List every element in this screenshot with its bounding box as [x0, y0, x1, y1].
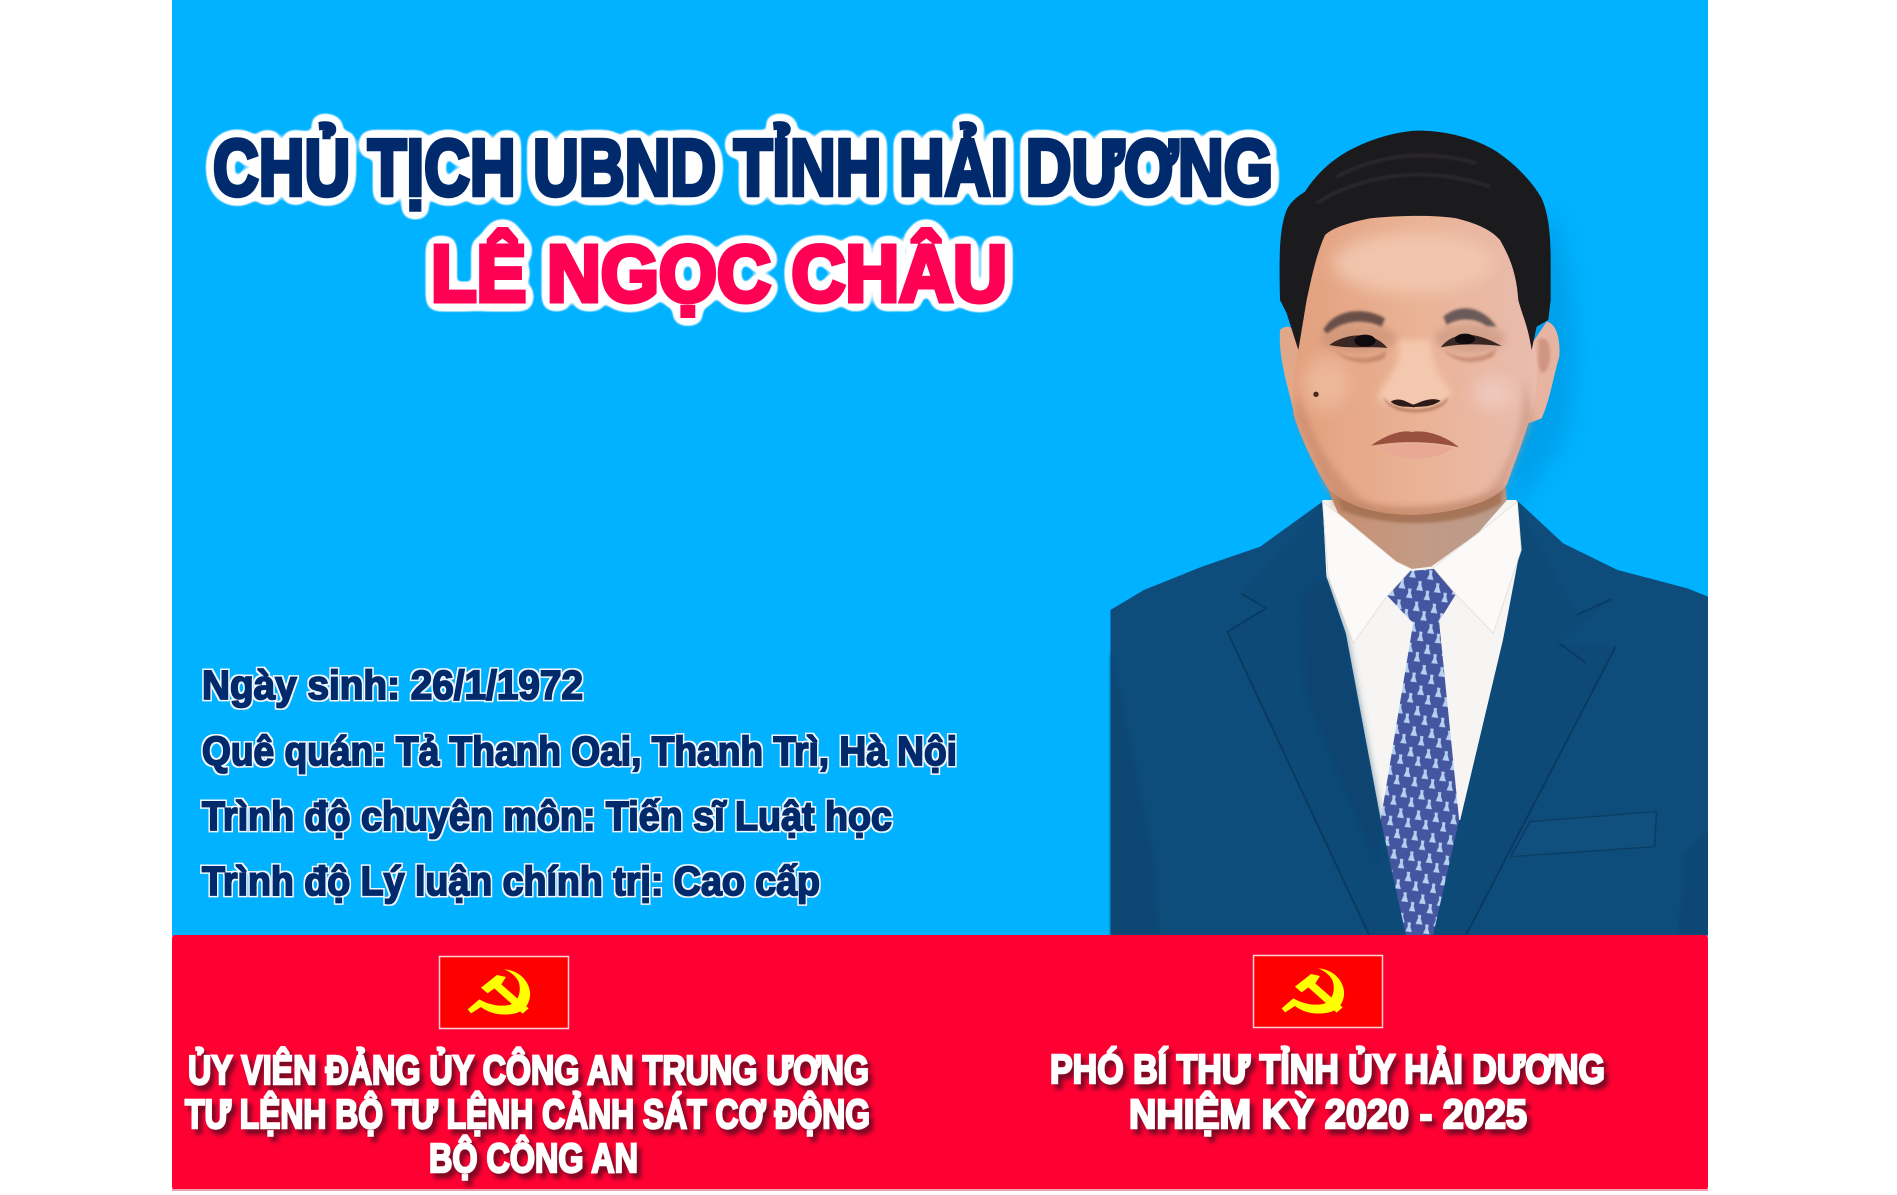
panel: blue background	[172, 0, 1708, 936]
text block: left party and police roles: TƯ LỆNH BỘ TƯ LỆNH CẢNH SÁT CƠ ĐỘNG	[185, 1091, 870, 1137]
title: person name: LÊ NGỌC CHÂU	[431, 229, 1007, 318]
text block: biography facts: Ngày sinh: 26/1/1972	[202, 662, 583, 708]
text block: right provincial party role: NHIỆM KỲ 2020 - 2025	[1129, 1091, 1527, 1137]
face	[1293, 210, 1537, 515]
icon: party flag left	[440, 956, 568, 1028]
eye sockets	[1320, 323, 1397, 353]
title: position heading: CHỦ TỊCH UBND TỈNH HẢI DƯƠNG	[213, 123, 1273, 212]
mouth	[1371, 431, 1459, 447]
jacket lapels	[1323, 516, 1381, 820]
face shading	[1290, 400, 1360, 501]
image: portrait of the chairman	[1110, 131, 1708, 935]
text block: left party and police roles	[185, 1047, 870, 1181]
hair	[1280, 131, 1551, 350]
suit jacket	[1110, 500, 1708, 935]
neck	[1324, 480, 1507, 569]
eyebrows	[1323, 311, 1385, 333]
text block: biography facts: Trình độ chuyên môn: Tiến sĩ Luật học	[202, 793, 892, 839]
text block: left party and police roles: ỦY VIÊN ĐẢNG ỦY CÔNG AN TRUNG ƯƠNG	[188, 1047, 869, 1093]
jacket seams	[1227, 593, 1616, 935]
text block: right provincial party role	[1050, 1046, 1605, 1137]
shirt	[1322, 500, 1521, 820]
eyes	[1329, 335, 1387, 348]
breast pocket	[1511, 812, 1656, 857]
tie	[1381, 620, 1459, 935]
panel: red footer band	[172, 935, 1708, 1191]
text block: biography facts	[202, 662, 957, 904]
text block: right provincial party role: PHÓ BÍ THƯ TỈNH ỦY HẢI DƯƠNG	[1050, 1046, 1605, 1092]
head shadow on background	[1507, 224, 1578, 502]
nose	[1378, 340, 1452, 408]
text block: biography facts: Quê quán: Tả Thanh Oai, Thanh Trì, Hà Nội	[202, 728, 957, 774]
under-eye shade	[1333, 350, 1387, 363]
text block: biography facts: Trình độ Lý luận chính trị: Cao cấp	[202, 858, 820, 904]
mole	[1313, 392, 1319, 397]
ears	[1280, 326, 1298, 410]
text block: left party and police roles: BỘ CÔNG AN	[429, 1135, 638, 1181]
icon: party flag right	[1254, 956, 1382, 1028]
collar points	[1322, 502, 1412, 643]
